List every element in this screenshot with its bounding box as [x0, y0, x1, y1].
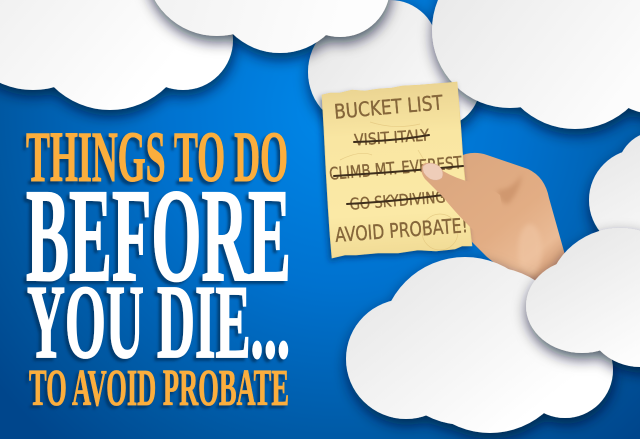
- cloud: right edge: [589, 131, 640, 251]
- paper sheet: [322, 82, 472, 258]
- cloud: top right: [432, 0, 640, 129]
- heading: bucket list: BUCKET LIST: [333, 90, 444, 124]
- finger fold shading: [497, 174, 522, 204]
- title: [26, 117, 291, 417]
- finger highlight: [518, 224, 542, 276]
- title line: to avoid probate: TO AVOID PROBATE: [29, 360, 289, 417]
- title: THINGS TO DO: [26, 117, 288, 197]
- hand: fingers behind paper: [458, 153, 567, 292]
- item: climb mt everest: CLIMB MT. EVEREST: [328, 153, 463, 185]
- cloud: behind paper: [308, 0, 480, 130]
- title line: you die: YOU DIE...: [27, 263, 290, 380]
- item: go skydiving: GO SKYDIVING: [349, 187, 446, 214]
- item: visit italy: VISIT ITALY: [354, 125, 430, 150]
- cloud: top center: [145, 0, 390, 53]
- strike-through lines: [334, 135, 463, 204]
- cloud: bottom center: [346, 257, 613, 433]
- text: bucket list: [328, 90, 469, 247]
- paper creases: [340, 122, 458, 250]
- bucket list paper: [322, 82, 472, 258]
- fingernail: [423, 163, 443, 180]
- cloud: bottom right: [526, 228, 640, 376]
- cloud: top left: [0, 0, 233, 110]
- hand: thumb over paper: [421, 163, 508, 240]
- item: avoid probate: AVOID PROBATE!: [334, 213, 469, 247]
- infographic scene: BEFORE: [26, 161, 291, 309]
